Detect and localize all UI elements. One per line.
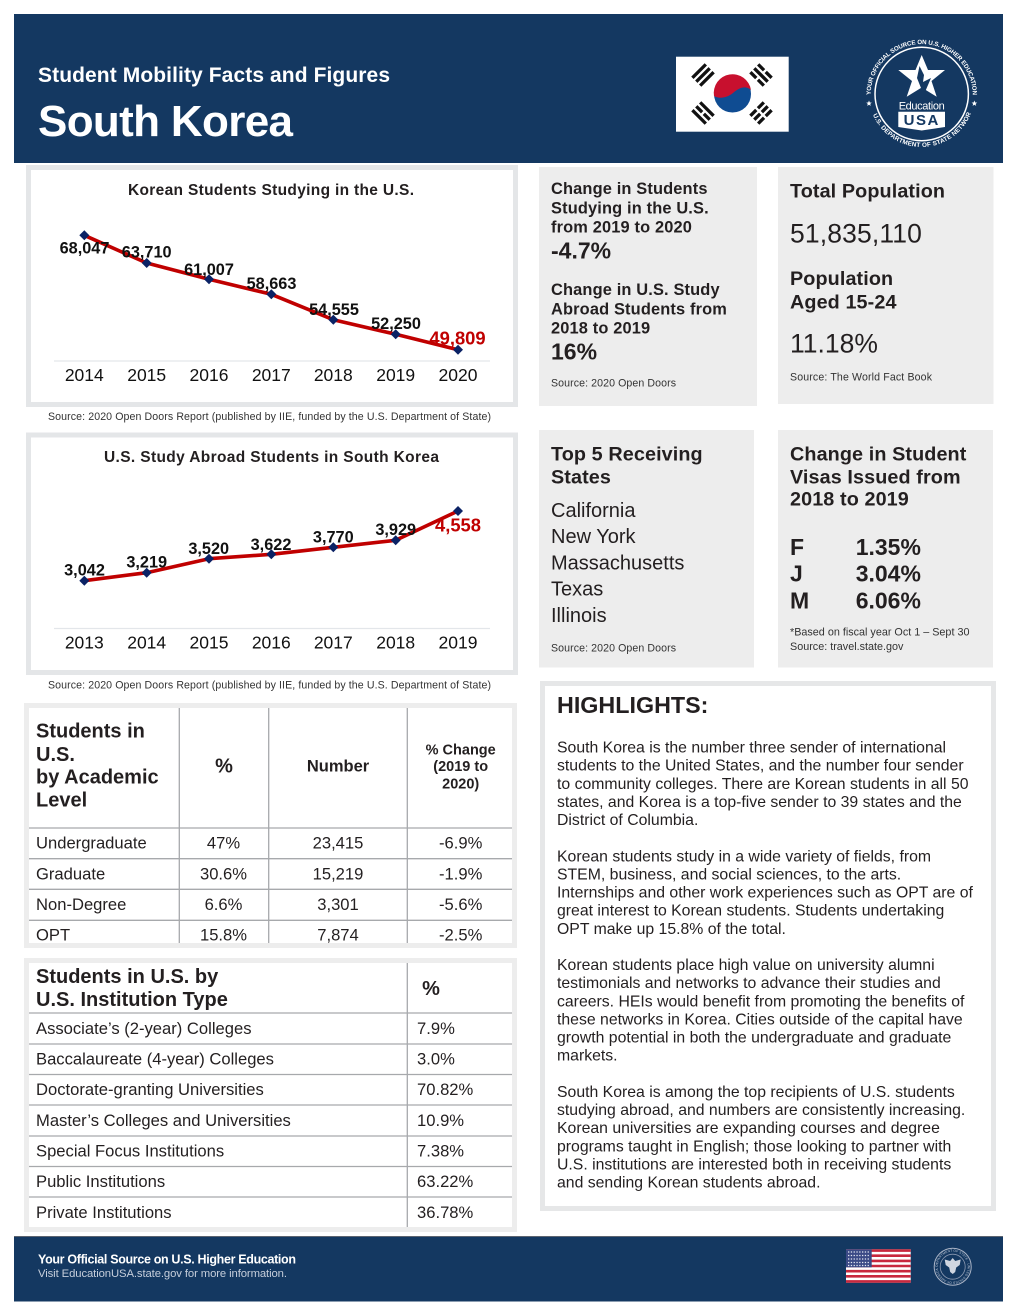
visa rows: 6.06%: [856, 588, 921, 614]
column headers: Number: [307, 757, 370, 775]
highlights paragraph 1: South Korea is the number three sender of international: [557, 740, 946, 756]
heading: change in student visas: 2018 to 2019: [790, 489, 909, 511]
column headers: (2019 to: [433, 759, 488, 775]
data labels: 54,555: [309, 301, 359, 319]
table rows: Special Focus Institutions: [36, 1142, 224, 1160]
table rows: -1.9%: [439, 864, 483, 883]
highlights heading: HIGHLIGHTS:: [557, 692, 708, 718]
data labels: [64, 515, 481, 579]
table rows: 6.6%: [205, 895, 243, 914]
heading: change in student visas: Change in Student: [790, 443, 967, 465]
title: student mobility: Student Mobility Facts and Figures: [38, 64, 390, 87]
list of states: Illinois: [551, 605, 607, 627]
table rows: 23,415: [313, 833, 363, 852]
visa rows: J: [790, 561, 803, 587]
data labels: 63,710: [122, 244, 172, 262]
footer banner: [14, 1236, 1003, 1302]
table rows: Non-Degree: [36, 895, 126, 914]
icon: Department of State seal: DEPARTMENT OF STATE · UNITED STATES OF AMERICA: [935, 1250, 970, 1284]
panel: top receiving states: [539, 430, 754, 668]
panel: population: [778, 167, 994, 404]
highlights paragraph 2: Internships and other work experiences such as OPT are of: [557, 884, 974, 902]
source note: chart 2: Source: 2020 Open Doors Report (published by IIE, funded by the U.S. Department of State): [48, 679, 491, 691]
x axis years: 2017: [252, 365, 291, 385]
stat heading: population aged 15-24: Aged 15-24: [790, 291, 897, 313]
data labels: 61,007: [184, 261, 234, 279]
visa rows: 1.35%: [856, 534, 921, 560]
table heading: Students in U.S. by: [36, 966, 219, 988]
stat heading: study abroad change: Abroad Students from: [551, 300, 727, 318]
table rows: Master’s Colleges and Universities: [36, 1111, 291, 1130]
highlights paragraph 2: OPT make up 15.8% of the total.: [557, 921, 786, 938]
panel: highlights: [542, 684, 994, 1208]
visa rows: M: [790, 588, 809, 614]
logo wordmark: Education: [899, 100, 945, 112]
table rows: 30.6%: [200, 864, 247, 883]
stat heading: change in students: Change in Students: [551, 180, 708, 198]
table heading: by Academic: [36, 766, 159, 788]
heading: change in student visas: Visas Issued from: [790, 466, 961, 488]
stat heading: change in students: Studying in the U.S.: [551, 199, 709, 217]
table rows: -2.5%: [439, 926, 483, 945]
visa rows: F: [790, 534, 804, 560]
table heading: Students in: [36, 721, 145, 743]
stat heading: change in students: from 2019 to 2020: [551, 219, 692, 237]
column headers: 2020): [442, 777, 479, 793]
stat value: 16%: 16%: [551, 338, 597, 364]
seal text: top arc: YOUR OFFICIAL SOURCE ON U.S. HIGHER EDUCATION: [866, 40, 978, 95]
table rows: 15.8%: [200, 926, 247, 945]
table rows: -5.6%: [439, 895, 483, 914]
stat value: 11.18%: 11.18%: [790, 329, 878, 359]
table rows: [36, 833, 483, 945]
data labels: 3,219: [126, 553, 167, 571]
highlights paragraph 4: and sending Korean students abroad.: [557, 1174, 820, 1192]
stat heading: total population: Total Population: [790, 180, 945, 202]
stat heading: population aged 15-24: Population: [790, 268, 893, 290]
stat heading: study abroad change: 2018 to 2019: [551, 319, 650, 337]
table: students by academic level: [26, 706, 514, 946]
data labels: 3,929: [375, 521, 416, 539]
table rows: -6.9%: [439, 833, 483, 852]
x axis years: 2016: [190, 365, 228, 385]
x axis years: 2015: [127, 365, 166, 385]
column header: %: [422, 978, 440, 1000]
table rows: Doctorate-granting Universities: [36, 1080, 264, 1099]
highlights paragraph 3: these networks in Korea. Cities outside of the capital have: [557, 1011, 963, 1028]
highlights paragraph 1: states, and Korea is a top-five sender to 39 states and the: [557, 794, 962, 811]
table rows: Associate’s (2-year) Colleges: [36, 1019, 252, 1038]
highlights paragraph 4: programs taught in English; those looking to partner with: [557, 1138, 951, 1155]
data labels: 3,622: [251, 536, 291, 554]
x axis years: 2018: [376, 633, 415, 653]
table heading: U.S.: [36, 744, 75, 766]
x axis years: 2016: [252, 633, 291, 653]
panel: Korean students line chart: [28, 168, 516, 404]
highlights paragraph 2: great interest to Korean students. Students undertaking: [557, 903, 944, 920]
highlights paragraph 2: Korean students study in a wide variety of fields, from: [557, 848, 931, 865]
table rows: 10.9%: [417, 1111, 464, 1130]
data labels: 3,042: [64, 561, 105, 579]
x axis years: 2019: [376, 365, 415, 385]
highlights paragraph 2: STEM, business, and social sciences, to the arts.: [557, 866, 901, 883]
x axis years: [65, 365, 478, 385]
icon: US flag: [846, 1249, 911, 1283]
highlights paragraph 3: careers. HEIs would benefit from promoting the benefits of: [557, 993, 965, 1010]
header banner: [14, 14, 1003, 163]
visa rows: [790, 534, 921, 614]
data labels: [60, 240, 486, 348]
logo USA badge: [898, 112, 945, 130]
table rows: 47%: [207, 833, 240, 852]
highlights paragraph 4: South Korea is among the top recipients of U.S. students: [557, 1084, 955, 1101]
source note: Source: The World Fact Book: [790, 372, 933, 384]
icon: seal star: [898, 55, 945, 97]
table rows: 63.22%: [417, 1172, 474, 1191]
table rows: 3.0%: [417, 1050, 455, 1068]
stat value: total population: 51,835,110: [790, 218, 922, 248]
table rows: [36, 1019, 474, 1222]
data labels: 52,250: [371, 315, 421, 333]
table rows: Baccalaureate (4-year) Colleges: [36, 1050, 274, 1068]
source note: Source: 2020 Open Doors: [551, 378, 676, 390]
data labels: 3,520: [188, 540, 229, 558]
x axis years: 2018: [314, 365, 353, 385]
logo: EducationUSA seal: [866, 40, 978, 147]
table heading: Level: [36, 790, 87, 812]
panel: study abroad line chart: [28, 435, 516, 672]
x axis years: 2015: [190, 633, 228, 653]
highlights paragraph 4: U.S. institutions are interested both in receiving students: [557, 1156, 951, 1173]
list of states: California: [551, 500, 636, 522]
footnote and source: Source: travel.state.gov: [790, 641, 904, 653]
highlights paragraph 1: students to the United States, and the number four sender: [557, 758, 964, 775]
table rows: Private Institutions: [36, 1203, 172, 1222]
x axis years: 2014: [65, 365, 104, 385]
table rows: Public Institutions: [36, 1172, 165, 1191]
icon: flag of South Korea: [676, 57, 789, 132]
source note: chart 1: Source: 2020 Open Doors Report (published by IIE, funded by the U.S. Department of State): [48, 411, 491, 423]
title: country: South Korea: [38, 97, 294, 146]
source note: Source: 2020 Open Doors: [551, 643, 676, 655]
table rows: Graduate: [36, 864, 105, 883]
data labels: 68,047: [60, 240, 109, 258]
data labels: 4,558: [435, 515, 481, 536]
visa rows: 3.04%: [856, 561, 921, 587]
footer link text: Visit EducationUSA.state.gov for more information.: [38, 1268, 287, 1280]
highlights paragraph 3: markets.: [557, 1048, 618, 1065]
line series: [84, 235, 458, 350]
table rows: 7.9%: [417, 1019, 455, 1038]
table rows: Undergraduate: [36, 833, 147, 852]
panel: student visas: [778, 430, 993, 668]
highlights paragraph 3: testimonials and networks to advance their studies and: [557, 975, 941, 992]
footer tagline: Your Official Source on U.S. Higher Education: [38, 1253, 296, 1267]
column headers: %: [215, 756, 233, 778]
stat value: -4.7%: -4.7%: [551, 237, 611, 263]
table rows: 70.82%: [417, 1080, 474, 1099]
highlights paragraph 3: Korean students place high value on university alumni: [557, 957, 935, 974]
data labels: 3,770: [313, 529, 354, 547]
x axis years: 2017: [314, 633, 353, 653]
column headers: [215, 742, 496, 793]
heading: top 5 receiving states: Top 5 Receiving: [551, 443, 703, 465]
heading: top 5 receiving states: States: [551, 466, 611, 488]
footnote and source: *Based on fiscal year Oct 1 – Sept 30: [790, 627, 969, 639]
table rows: 3,301: [317, 895, 359, 914]
x axis years: 2013: [65, 633, 104, 653]
table rows: OPT: [36, 926, 70, 945]
table: students by institution type: [26, 960, 514, 1230]
table rows: 15,219: [313, 864, 363, 883]
highlights paragraph 1: District of Columbia.: [557, 812, 698, 829]
x axis years: 2014: [127, 633, 166, 653]
logo: EducationUSA seal: USA: [904, 112, 940, 129]
list of states: Texas: [551, 579, 603, 601]
list of states: New York: [551, 526, 636, 548]
chart title: Korean Students Studying in the U.S.: [128, 182, 414, 199]
list of states: Massachusetts: [551, 552, 684, 574]
chart title: U.S. Study Abroad Students in South Korea: [104, 449, 439, 466]
highlights paragraph 4: studying abroad, and numbers are consistently increasing.: [557, 1102, 965, 1119]
x axis years: 2019: [439, 633, 477, 653]
data markers: [79, 506, 463, 586]
table rows: 7.38%: [417, 1142, 464, 1160]
x axis years: [65, 633, 477, 653]
highlights paragraph 4: Korean universities are expanding courses and degree: [557, 1120, 940, 1137]
column headers: % Change: [426, 742, 496, 758]
panel: change in students: [539, 167, 757, 406]
table rows: 36.78%: [417, 1203, 474, 1222]
stat heading: study abroad change: Change in U.S. Study: [551, 281, 720, 299]
highlights paragraph 1: to community colleges. There are Korean students in all 50: [557, 776, 969, 793]
line series: [84, 511, 458, 581]
highlights paragraph 3: growth potential in both the undergraduate and graduate: [557, 1030, 952, 1046]
table heading: U.S. Institution Type: [36, 989, 228, 1011]
data markers: [79, 230, 463, 355]
x axis years: 2020: [439, 365, 478, 385]
table rows: 7,874: [317, 926, 359, 945]
data labels: 49,809: [429, 327, 486, 348]
data labels: 58,663: [247, 275, 296, 293]
